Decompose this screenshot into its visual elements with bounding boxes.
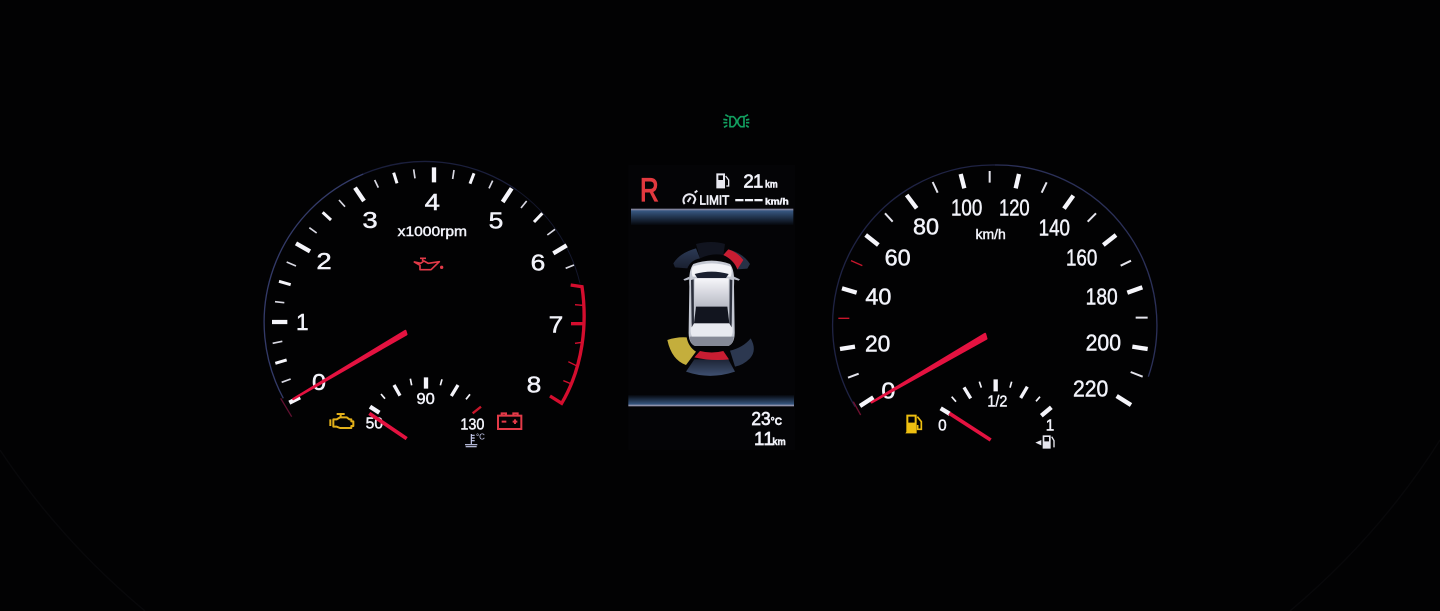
outside temperature: 23: [751, 408, 771, 429]
speedometer numerals: 120: [999, 195, 1030, 221]
fuel needle: [949, 413, 991, 440]
icon: battery warning: [498, 413, 521, 429]
speedometer numerals: 160: [1066, 244, 1097, 270]
icon: speed limiter: [683, 191, 697, 204]
icon: check engine: [330, 414, 353, 428]
parking sensor display: [667, 242, 754, 376]
temperature unit: °C: [771, 416, 782, 428]
speedometer numerals: 0: [881, 377, 895, 403]
fuel range value: 21: [743, 170, 763, 191]
speed unit label: km/h: [976, 226, 1006, 242]
tachometer numerals: 3: [362, 207, 378, 233]
top divider bar: [631, 209, 793, 225]
tachometer numerals: 5: [489, 208, 503, 234]
speedometer numerals: 20: [865, 330, 890, 356]
tachometer gauge: [264, 161, 585, 447]
fuel range unit: km: [765, 179, 778, 190]
speedometer bezel ring: [833, 165, 1157, 415]
trip distance unit: km: [772, 437, 786, 448]
tachometer numerals: 7: [549, 311, 563, 337]
trip distance value: 11: [754, 428, 774, 449]
front centre sensor: [696, 242, 725, 258]
icon: oil pressure warning: [414, 258, 442, 270]
display panel backdrop: [628, 165, 795, 450]
speed limit label: LIMIT: [699, 194, 730, 208]
tachometer numerals: 4: [425, 189, 440, 215]
fuel gauge labels: 1: [1046, 417, 1054, 434]
icon: coolant temperature: °C: [476, 432, 485, 441]
speed limit dashes: ---: [735, 192, 764, 208]
tachometer numerals: 2: [316, 248, 332, 274]
icon: green headlight indicator: [723, 115, 749, 127]
temperature needle: [369, 413, 407, 439]
speedometer numerals: 40: [865, 284, 891, 310]
speedometer numerals: 100: [951, 195, 982, 221]
rear left yellow sensor: [667, 337, 696, 365]
icon: fuel filler side: [1035, 435, 1054, 449]
tachometer tick marks: [272, 167, 574, 403]
rear centre red arc: [694, 351, 729, 360]
speedometer numerals: 180: [1086, 284, 1118, 310]
front left sensor: [673, 248, 700, 268]
icon: coolant temperature: [465, 432, 485, 447]
rpm unit label: x1000rpm: [398, 223, 467, 239]
bottom divider bar: [628, 395, 794, 406]
temperature gauge ticks: [370, 377, 481, 413]
speedometer numerals: 200: [1086, 330, 1121, 356]
fuel gauge labels: 1/2: [987, 393, 1007, 410]
speedometer gauge: [833, 165, 1157, 449]
rear right sensor: [730, 338, 754, 367]
temperature gauge labels: 50: [366, 416, 383, 433]
center display: [628, 115, 795, 450]
rear centre sensor: [686, 359, 735, 376]
speedometer tick marks: [838, 171, 1148, 406]
temperature gauge labels: 90: [416, 391, 435, 408]
tachometer numerals: 1: [296, 309, 309, 335]
front right red arc: [723, 249, 743, 269]
temperature gauge labels: [366, 391, 484, 433]
speedometer numerals: 60: [885, 244, 911, 270]
speedometer numerals: 220: [1073, 376, 1108, 402]
fuel gauge ticks: [941, 379, 1051, 416]
icon: fuel range pump: [716, 173, 729, 188]
speedometer numerals: [865, 195, 1121, 403]
tachometer needle: [293, 331, 406, 399]
gear indicator R: R: [640, 171, 659, 208]
tachometer numerals: [296, 189, 563, 397]
tachometer numerals: 6: [531, 249, 545, 275]
speedometer needle: [872, 334, 986, 402]
tachometer numerals: 0: [312, 369, 326, 395]
car top view: [683, 261, 740, 346]
tachometer redline zone: [550, 285, 585, 403]
temperature gauge labels: 130: [460, 416, 484, 433]
speedometer numerals: 140: [1039, 214, 1070, 240]
speed limit unit: km/h: [765, 197, 789, 207]
tachometer bezel ring: [264, 161, 580, 417]
icon: low fuel warning: [905, 415, 921, 433]
fuel gauge labels: 0: [938, 418, 947, 435]
front right sensor: [723, 249, 750, 269]
fuel gauge labels: [938, 393, 1054, 435]
tachometer numerals: 8: [527, 371, 541, 397]
speedometer numerals: 80: [913, 214, 939, 240]
